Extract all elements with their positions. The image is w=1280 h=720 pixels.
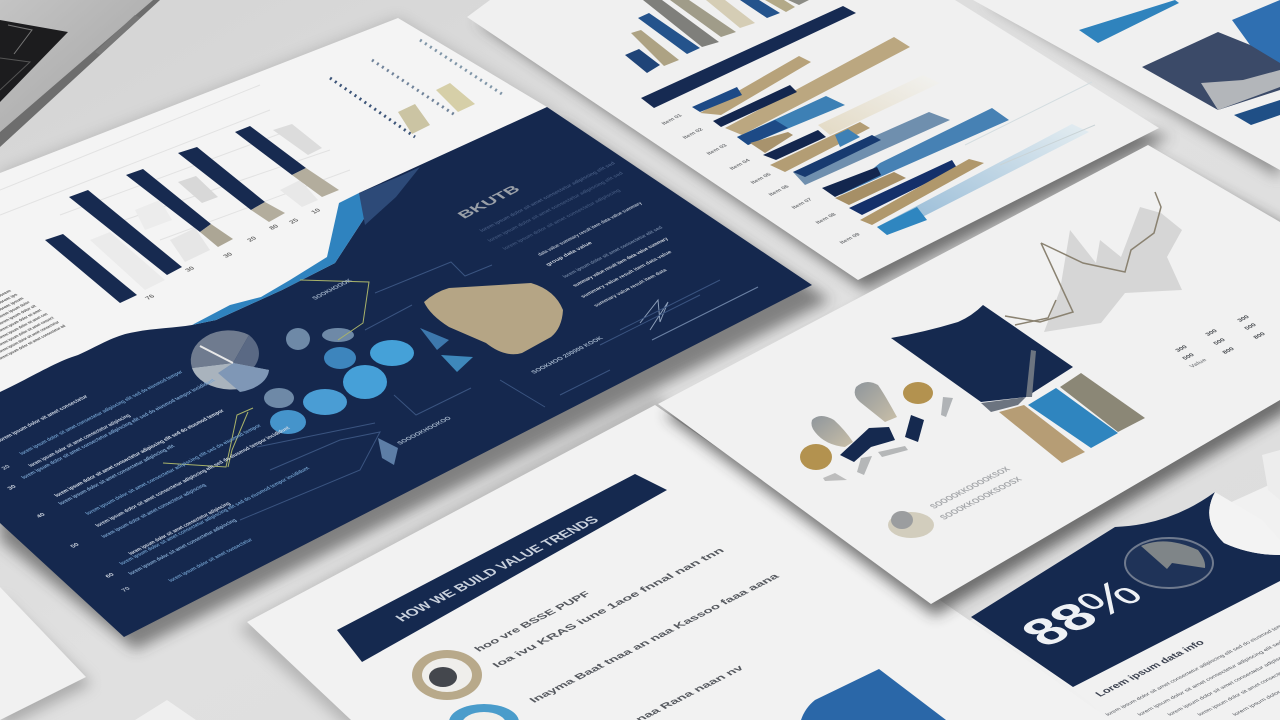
list text: Inayma Baat tnaa an naa Kassoo faaa aana: [528, 573, 782, 705]
thin connector lines: [240, 262, 758, 520]
mid labels: [311, 278, 605, 446]
row labels: [661, 113, 862, 245]
left data table text: lorem ipsum dolor sit amet consectetur adipiscing elit sed do eiusmod tempor: [18, 369, 185, 456]
axis labels: 76: [144, 294, 157, 301]
gray small blobs: [264, 328, 354, 408]
column bars: [45, 126, 339, 303]
stat value: 88%: [1009, 572, 1155, 654]
axis labels: 10: [310, 208, 323, 215]
row labels: Item 07: [791, 197, 814, 210]
panel: lower right white sheet: [960, 480, 1280, 720]
upper right text block: lorem ipsum dolor sit amet consectetur elit sed: [562, 225, 665, 279]
row labels: Item 08: [815, 212, 838, 225]
left data table text: 20: [0, 464, 13, 471]
row labels: Item 04: [729, 158, 753, 171]
left data table text: lorem ipsum dolor sit amet consectetur adipiscing elit sed do eiusmod tempor incididunt: [20, 378, 217, 480]
panel: mid right sheet: [658, 145, 1280, 616]
icon: scattered shapes: [800, 382, 953, 481]
left data table text: lorem ipsum dolor sit amet consectetur adipiscing: [100, 483, 208, 539]
white page curl: [1209, 492, 1280, 555]
list text: [473, 547, 782, 720]
upper right text block: summary value result item data value summary: [572, 237, 671, 288]
left data table text: lorem ipsum dolor sit amet consectetur adipiscing elit: [57, 444, 176, 506]
left data table text: 60: [104, 572, 117, 579]
number table: 800: [1221, 346, 1237, 355]
horizontal bar chart: [692, 37, 1095, 235]
body copy: lorem ipsum dolor sit amet consectetur: [0, 320, 61, 354]
header bar: [641, 6, 856, 108]
panel: top right report sheet: [973, 0, 1280, 178]
panel: lower text sheet: [238, 395, 1110, 720]
blue corner shape: [1232, 0, 1280, 63]
upper right text block: group data value: [545, 241, 594, 267]
left data table text: 30: [6, 484, 19, 491]
left data table text: lorem ipsum dolor sit amet consectetur adipiscing elit sed do eiusmod tempor incididunt: [118, 466, 311, 566]
left data table text: lorem ipsum dolor sit amet consectetur adipiscing: [127, 518, 239, 576]
panel: navy dashboard sheet: [0, 107, 830, 650]
funnel icon: [378, 438, 398, 465]
axis labels: 30: [184, 266, 197, 273]
icon: small pie: [888, 511, 934, 538]
left data table text: lorem ipsum dolor sit amet consectetur: [167, 537, 255, 583]
mid labels: SOOOOKHOOKOO: [396, 416, 453, 446]
icon: blue badge: [449, 704, 519, 720]
number table: 300: [1204, 328, 1220, 337]
caption text: SOOOOKKOOOOKSOX: [928, 465, 1013, 511]
upper right text block: [479, 161, 674, 308]
title text: HOW WE BUILD VALUE TRENDS: [393, 514, 603, 624]
left data table text: lorem ipsum dolor sit amet consectetur adipiscing elit sed do eiusmod tempor: [84, 423, 264, 516]
gray shape in photo: [1201, 70, 1280, 110]
gray block: [1060, 373, 1145, 432]
list text: Ioa ivu KRAS iune 1aoe fnnal nan tnn: [491, 547, 727, 670]
grid lines: [0, 85, 350, 240]
number table: 500: [1243, 322, 1259, 331]
green line chart: [163, 280, 369, 467]
dashboard title: BKUTB: [455, 183, 524, 221]
lighter wave overlay: [359, 167, 420, 225]
background shape right: [1262, 450, 1280, 500]
panel: white chart sheet: [0, 18, 560, 400]
left data table text: 50: [69, 542, 82, 549]
list text: hoo vre BSSE PUPF: [473, 590, 594, 654]
caption text: SOOOKKOOOKSOOSX: [938, 475, 1025, 522]
navy block: [891, 305, 1073, 402]
upper right text block: lorem ipsum dolor sit amet consectetur adipiscing elit sed: [479, 161, 618, 233]
gray mountain shape: [1044, 207, 1182, 332]
number table: 300: [1236, 314, 1252, 323]
photo block: [1142, 32, 1280, 110]
left data table text: lorem ipsum dolor sit amet consectetur adipiscing: [27, 413, 132, 468]
left data table text: [0, 369, 311, 593]
row labels: Item 09: [839, 232, 862, 245]
upper right text block: summary value result item data value: [580, 250, 674, 299]
axis labels: 20: [246, 236, 259, 243]
light ghost bars: [90, 124, 322, 290]
upper right text block: summary value result item data: [593, 268, 669, 308]
upper right text block: data value summary result item data value summary: [537, 201, 645, 257]
panel: bar chart sheet: [467, 0, 1170, 290]
row labels: Item 05: [750, 172, 774, 185]
row labels: Item 02: [682, 127, 705, 140]
row labels: Item 03: [706, 143, 729, 156]
number table: 500: [1212, 337, 1228, 346]
mid labels: SOOKHOOOK: [311, 278, 354, 301]
line chart: [1005, 192, 1161, 325]
left data table text: 40: [35, 512, 48, 519]
number table: 800: [1252, 331, 1268, 340]
gray spokes: [981, 350, 1036, 412]
number table: Value: [1188, 357, 1209, 369]
mid labels: SOOKHOO 200000 KOOK: [530, 336, 605, 375]
stat paragraph: lorem ipsum dolor sit amet consectetur adipiscing elit sed do: [1137, 636, 1280, 717]
blue header bar: [1079, 0, 1179, 43]
icon: tan badge: [412, 650, 482, 700]
tan block: [999, 405, 1085, 463]
blue pill label: [1234, 100, 1280, 125]
blue wave band: [192, 193, 365, 325]
blue circles: [270, 328, 473, 434]
dotted legend: [330, 40, 505, 137]
axis labels: [144, 208, 323, 301]
blue shape at bottom: [801, 669, 946, 720]
number table: 300: [1174, 344, 1190, 353]
top column chart: [625, 0, 809, 73]
axis labels: 30: [222, 252, 235, 259]
stat heading: Lorem ipsum data info: [1094, 639, 1207, 699]
small sheet lower left: [0, 587, 92, 720]
left data table text: lorem ipsum dolor sit amet consectetur adipiscing: [127, 501, 232, 556]
title bar: [337, 474, 667, 662]
number table: [1174, 314, 1268, 369]
body copy: lorem ipsum dolor sit amet consectetur ad: [0, 324, 67, 361]
axis labels: 80: [268, 224, 281, 231]
upper right text block: lorem ipsum dolor sit amet consectetur adipiscing: [502, 188, 623, 251]
panel: navy statistic block: [971, 492, 1280, 687]
icon: gauge: [1125, 538, 1213, 588]
laptop corner: [0, 0, 160, 147]
upper right text block: lorem ipsum dolor sit amet consectetur adipiscing elit sed: [487, 171, 626, 243]
row labels: Item 01: [661, 113, 685, 126]
body copy: [0, 289, 67, 361]
axis labels: 25: [288, 218, 301, 225]
blue block: [1028, 388, 1118, 448]
left data table text: 70: [120, 586, 133, 593]
pie chart: [191, 330, 269, 392]
small sheet bottom edge: [135, 700, 196, 720]
left data table text: lorem ipsum dolor sit amet consectetur adipiscing elit sed do eiusmod tempor: [53, 408, 226, 498]
row labels: Item 06: [768, 184, 791, 197]
left data table text: lorem ipsum dolor sit amet consectetur adipiscing elit sed do eiusmod tempor incididunt: [94, 426, 292, 528]
tan blob: [424, 283, 563, 354]
number table: 500: [1181, 352, 1197, 361]
